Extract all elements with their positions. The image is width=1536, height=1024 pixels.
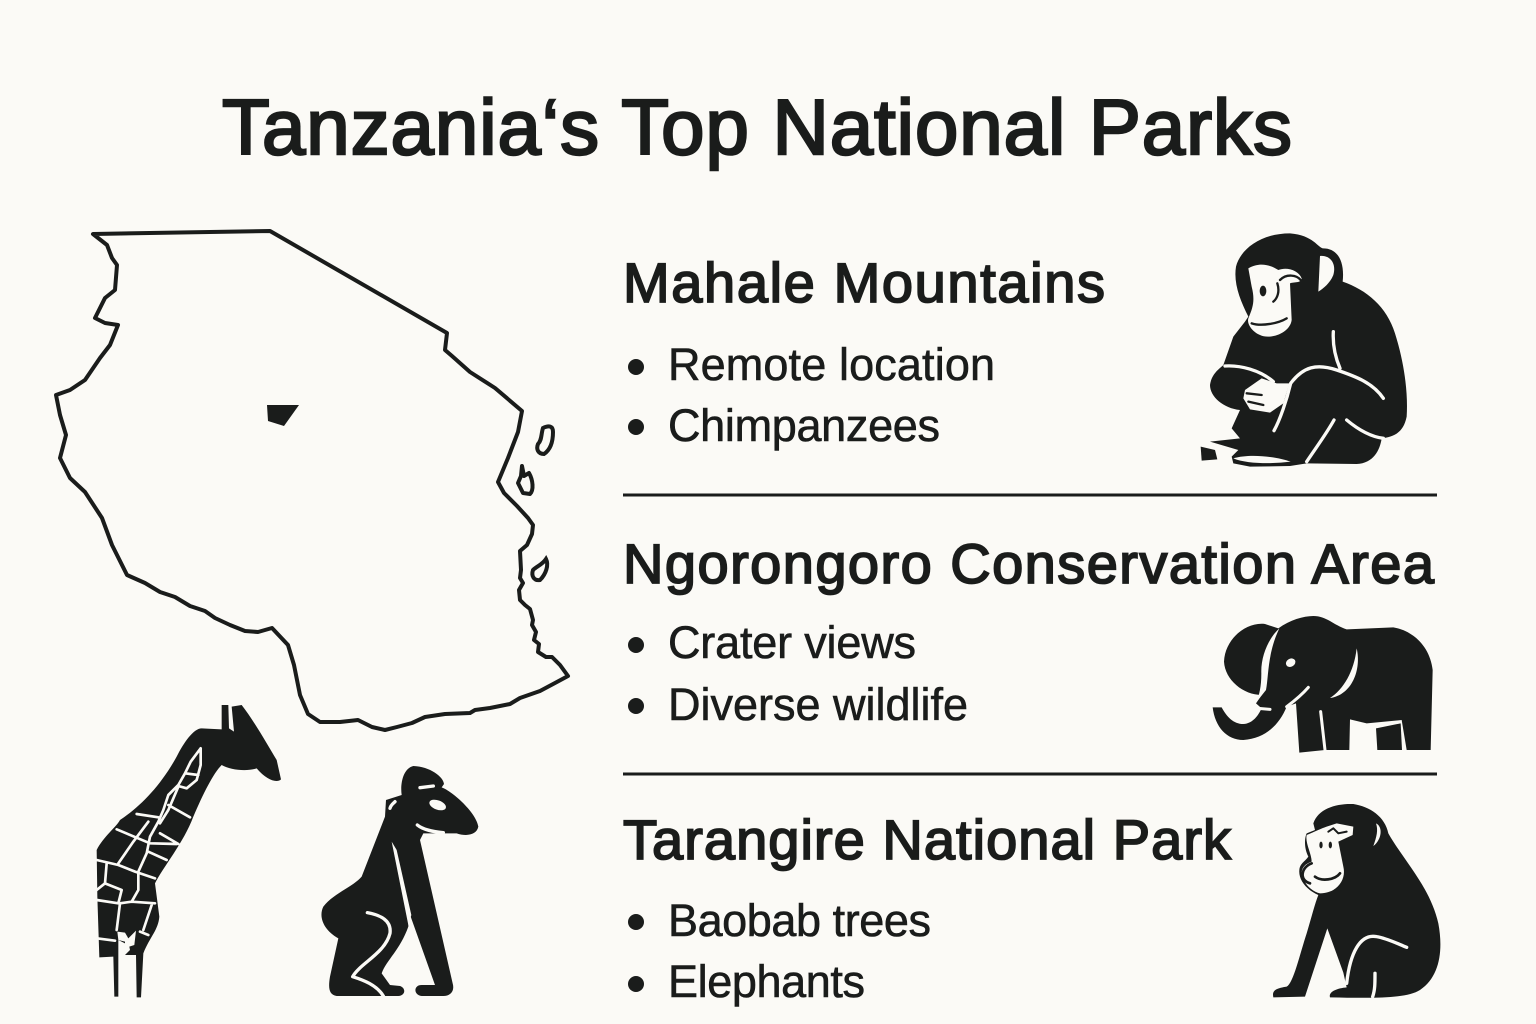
- icon: monkey: [1273, 804, 1440, 998]
- bullet: Crater views: Crater views: [668, 617, 916, 668]
- island: Zanzibar: [518, 466, 533, 494]
- map marker: park area: [267, 405, 299, 426]
- icon: seated animal: [321, 766, 478, 996]
- heading: Ngorongoro Conservation Area: Ngorongoro Conservation Area: [623, 532, 1435, 595]
- panel: Mahale Mountains: [623, 233, 1407, 467]
- bullet: Diverse wildlife: Diverse wildlife: [668, 679, 968, 730]
- island: Pemba: [537, 426, 553, 454]
- heading: Tarangire National Park: Tarangire National Park: [623, 808, 1232, 871]
- title: Tanzania‘s Top National Parks: [222, 83, 1292, 171]
- panel: Ngorongoro Conservation Area: [623, 532, 1435, 753]
- divider: [623, 494, 1437, 496]
- bullet: Remote location: Remote location: [668, 339, 995, 390]
- island: Mafia: [532, 559, 547, 580]
- panel: Tarangire National Park: [623, 804, 1440, 1007]
- bullet: Chimpanzees: Chimpanzees: [668, 400, 940, 451]
- bullet: Baobab trees: Baobab trees: [668, 895, 931, 946]
- heading: Mahale Mountains: Mahale Mountains: [623, 251, 1105, 314]
- map: Tanzania outline: [56, 231, 568, 730]
- bullet: Elephants: Elephants: [668, 956, 865, 1007]
- icon: elephant: [1213, 616, 1433, 753]
- divider: [623, 772, 1437, 776]
- icon: chimpanzee: [1201, 233, 1407, 467]
- icon: giraffe: [97, 705, 281, 997]
